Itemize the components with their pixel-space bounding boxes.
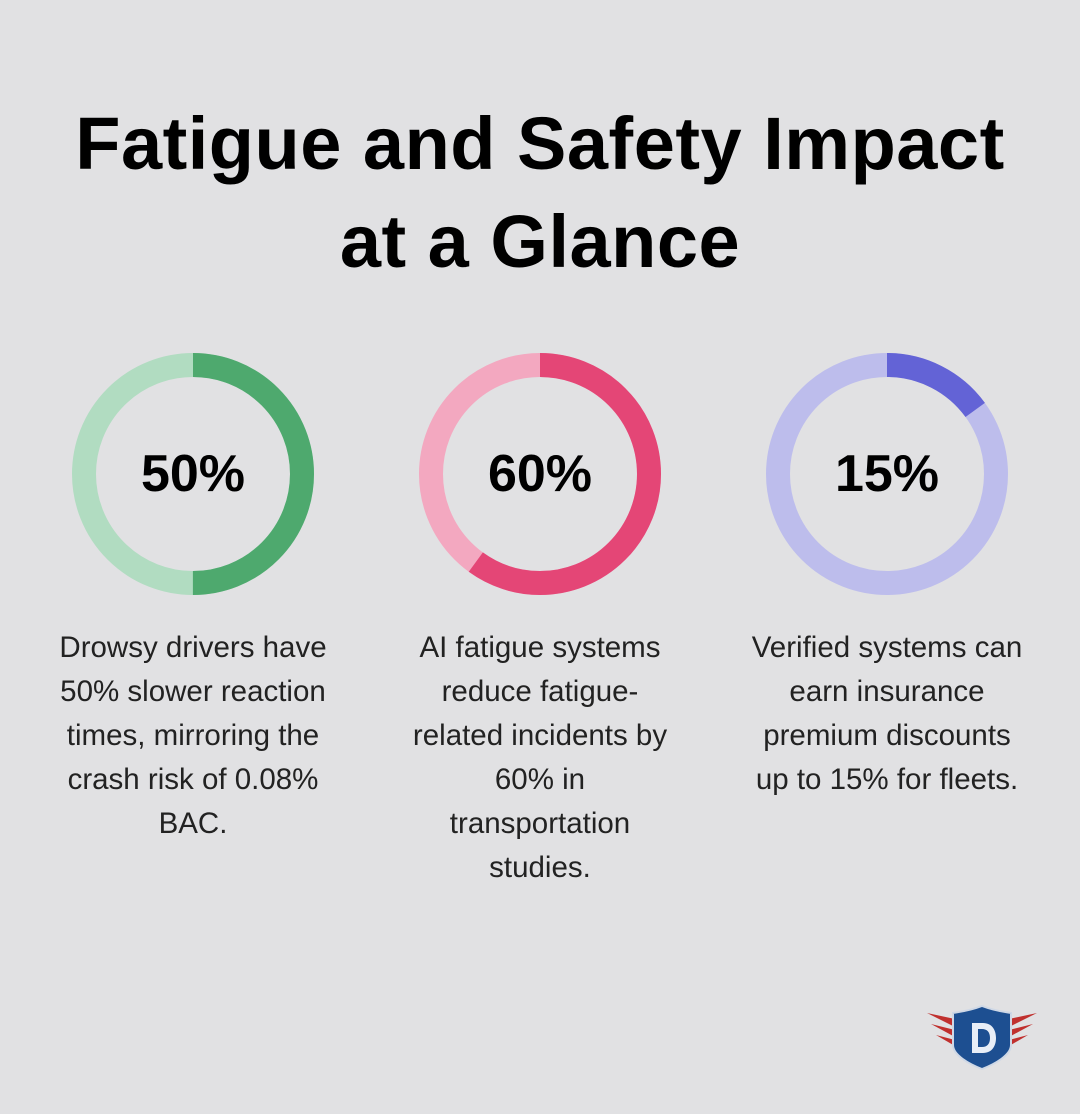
text: drowsy drivers: Drowsy drivers have	[59, 631, 327, 664]
text: AI fatigue systems: related incidents by	[413, 719, 667, 752]
donut: 50%: 50%	[141, 445, 245, 503]
logo	[927, 1005, 1037, 1070]
text: AI fatigue systems: studies.	[489, 851, 591, 884]
text: AI fatigue systems: AI fatigue systems	[419, 631, 660, 664]
text: verified systems: premium discounts	[763, 719, 1011, 752]
donut: 50%	[72, 353, 314, 595]
donut: 60%: 60%	[488, 445, 592, 503]
text: drowsy drivers	[59, 631, 327, 840]
donut: 15%: 15%	[835, 445, 939, 503]
text: AI fatigue systems	[413, 631, 667, 884]
title: at a Glance	[340, 200, 740, 283]
text: drowsy drivers: BAC.	[159, 807, 227, 840]
text: drowsy drivers: 50% slower reaction	[60, 675, 326, 708]
text: verified systems: up to 15% for fleets.	[756, 763, 1018, 796]
text: AI fatigue systems: 60% in	[495, 763, 585, 796]
title: Fatigue and Safety Impact	[75, 102, 1005, 185]
donut: 15%	[766, 353, 1008, 595]
donut: 60%	[419, 353, 661, 595]
text: AI fatigue systems: transportation	[450, 807, 630, 840]
text: AI fatigue systems: reduce fatigue-	[442, 675, 638, 708]
text: verified systems	[752, 631, 1022, 796]
title	[75, 102, 1005, 283]
text: drowsy drivers: crash risk of 0.08%	[68, 763, 318, 796]
text: drowsy drivers: times, mirroring the	[67, 719, 319, 752]
text: verified systems: Verified systems can	[752, 631, 1022, 664]
text: verified systems: earn insurance	[789, 675, 985, 708]
